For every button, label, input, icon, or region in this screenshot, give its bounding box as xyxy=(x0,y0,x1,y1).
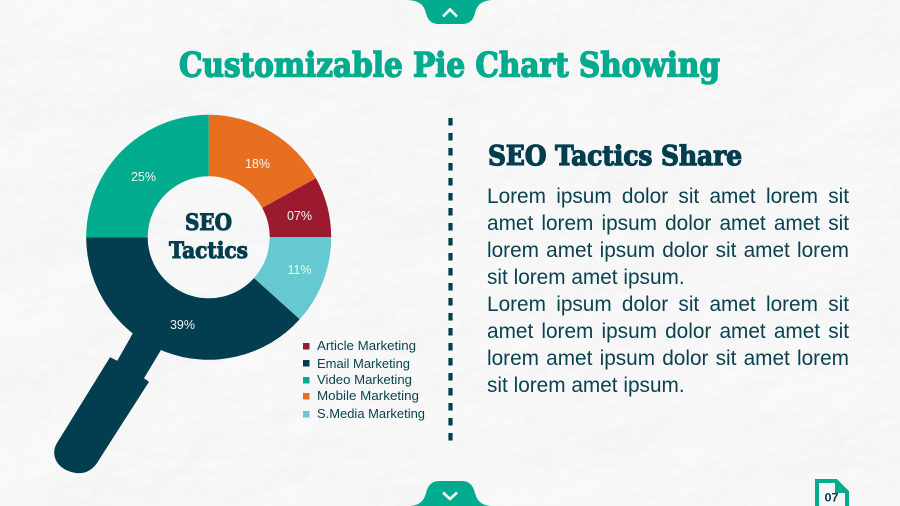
slice: video marketing 25% xyxy=(86,115,209,237)
body text: sit lorem amet ipsum. xyxy=(487,266,685,289)
body text: amet lorem ipsum dolor amet amet sit xyxy=(487,320,849,343)
slice: s.media marketing 11% xyxy=(254,237,331,319)
slice value labels: 11% xyxy=(287,263,312,277)
body text: lorem amet ipsum dolor sit amet lorem xyxy=(487,347,849,370)
title: Customizable Pie Chart Showing xyxy=(179,46,720,86)
body text: lorem amet ipsum dolor sit amet lorem xyxy=(487,239,849,262)
page number: 07 xyxy=(824,492,838,504)
legend xyxy=(303,338,425,421)
body text: sit lorem amet ipsum. xyxy=(487,374,685,397)
legend: Email Marketing xyxy=(317,356,410,371)
legend: Article Marketing xyxy=(317,338,416,353)
slice: mobile marketing 18% xyxy=(209,115,316,208)
slice value labels: 25% xyxy=(131,170,156,184)
bottom navigation tab xyxy=(410,481,491,506)
icon: up chevron xyxy=(443,10,457,16)
icon: down chevron xyxy=(443,492,457,499)
slice value labels: 07% xyxy=(287,209,312,223)
donut centre label: SEO xyxy=(185,210,232,236)
slice value labels: 18% xyxy=(245,157,270,171)
top navigation tab xyxy=(408,0,492,24)
donut centre label xyxy=(169,210,248,264)
legend: Mobile Marketing xyxy=(317,388,419,403)
body text: Lorem ipsum dolor sit amet lorem sit xyxy=(487,185,849,208)
icon: page number document xyxy=(817,479,849,506)
donut centre label: Tactics xyxy=(169,238,248,264)
legend: S.Media Marketing xyxy=(317,406,425,421)
slice value labels xyxy=(131,157,312,332)
body text xyxy=(487,185,849,397)
slice value labels: 39% xyxy=(170,318,195,332)
slice: article marketing 07% xyxy=(262,178,331,237)
body text: Lorem ipsum dolor sit amet lorem sit xyxy=(487,293,849,316)
legend: Video Marketing xyxy=(317,372,412,387)
subheading: SEO Tactics Share xyxy=(488,141,742,172)
magnifying glass donut chart xyxy=(54,115,331,473)
slice: email marketing 39% xyxy=(86,237,300,360)
body text: amet lorem ipsum dolor amet amet sit xyxy=(487,212,849,235)
magnifier handle xyxy=(54,333,161,473)
